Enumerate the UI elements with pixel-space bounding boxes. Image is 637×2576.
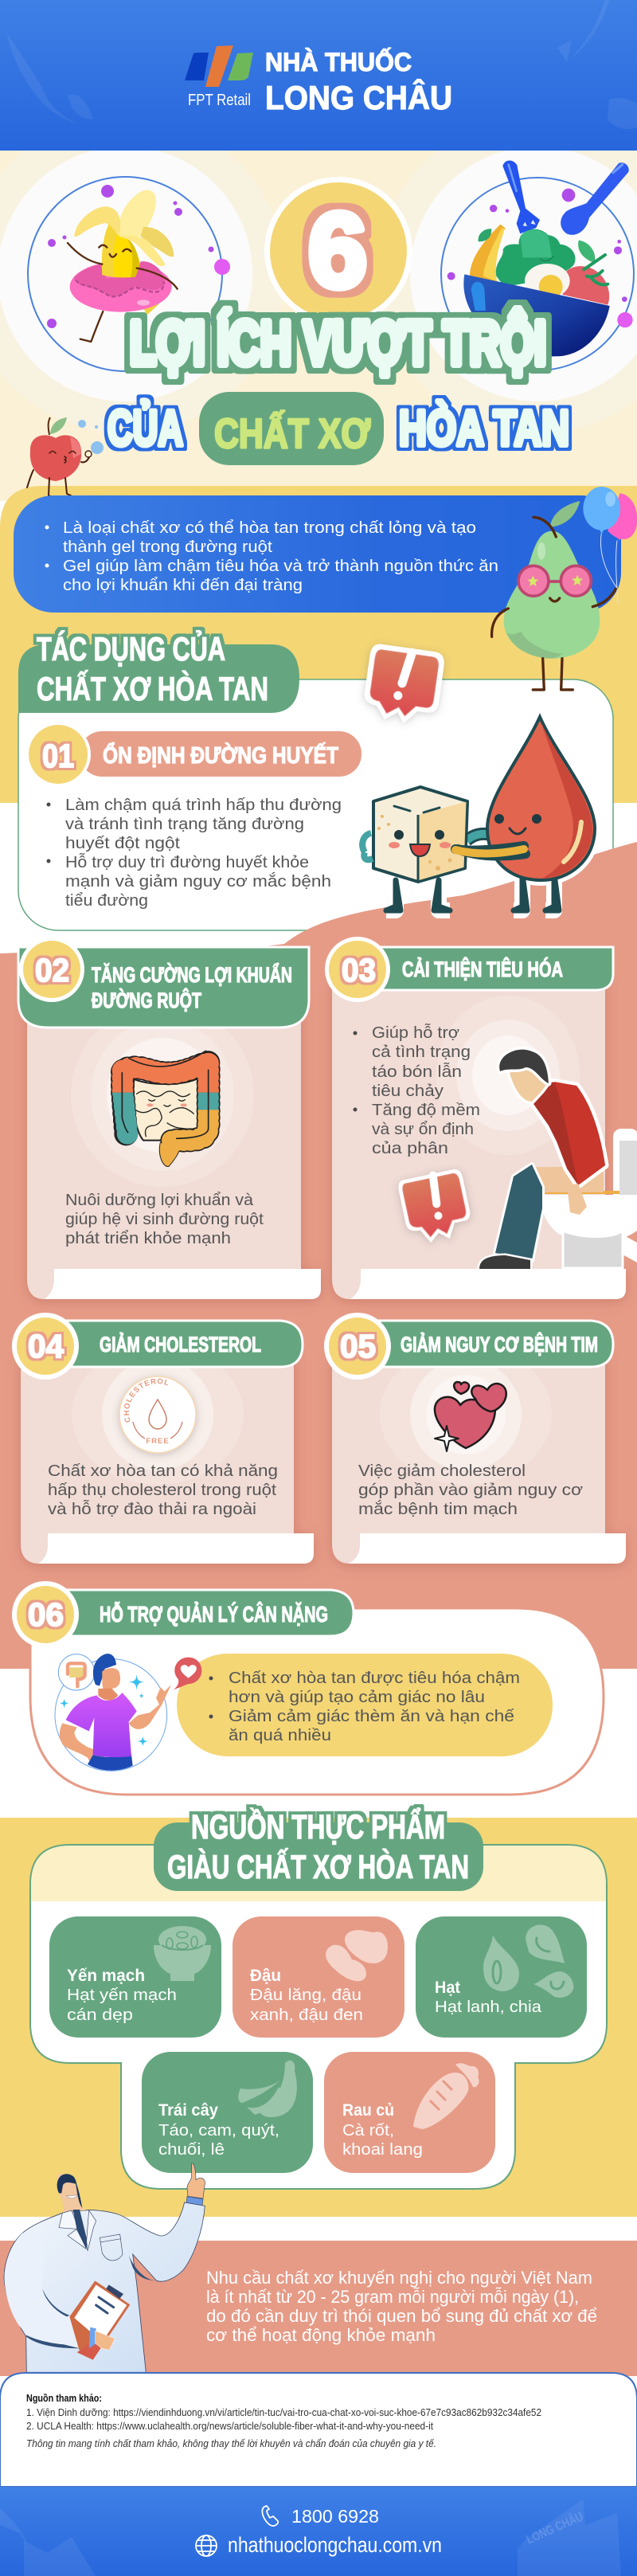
panel 05: heart disease	[324, 1313, 626, 1564]
icon: intestine	[122, 1051, 209, 1166]
text	[48, 1462, 278, 1518]
callout: ăn quá nhiều	[229, 1726, 331, 1744]
header 05: 05	[340, 1328, 376, 1364]
card: oats: Yến mạch	[67, 1967, 145, 1985]
header band	[0, 0, 637, 151]
background: salmon section	[0, 842, 637, 1669]
benefit 01 text: mạnh và giảm nguy cơ mắc bệnh	[65, 872, 331, 891]
white section below salmon	[0, 1669, 637, 1818]
icon: cholesterol free badge: FREE	[146, 1437, 170, 1446]
brand name: LONG CHÂU	[265, 78, 452, 116]
icon: FPT logo: FPT Retail	[188, 92, 251, 109]
icon: cholesterol free badge	[115, 1374, 200, 1458]
header 03: CẢI THIỆN TIÊU HÓA	[402, 956, 563, 981]
text: giúp hệ vi sinh đường ruột	[65, 1210, 264, 1228]
illustration: sugar cube and blood drop	[362, 717, 595, 910]
footer band: LONG CHÂU	[524, 2508, 585, 2547]
icon: speech bubble heart	[173, 1658, 201, 1690]
callout: Giảm cảm giác thèm ăn và hạn chế	[229, 1707, 515, 1725]
text: và sự ổn định	[372, 1120, 474, 1138]
panel: food sources	[30, 1807, 607, 2189]
card: oats: Hạt yến mạch	[67, 1986, 177, 2004]
text: Tăng độ mềm	[372, 1101, 480, 1119]
text: Việc giảm cholesterol	[358, 1462, 526, 1480]
card: oats	[49, 1916, 221, 2038]
illustration: banana in donut ring	[28, 177, 230, 371]
icon: cholesterol free badge: CHOLESTEROL	[123, 1378, 168, 1423]
text	[65, 1191, 264, 1247]
benefit 01 header: 01	[42, 738, 74, 774]
brand name: NHÀ THUỐC	[265, 48, 412, 76]
icon: bananas	[238, 2061, 297, 2117]
illustration: doctor	[4, 2163, 205, 2372]
text: Chất xơ hòa tan có khả năng	[48, 1462, 278, 1480]
panel: references: Thông tin mang tính chất tham khảo, không thay thế lời khuyên và chẩn đoán của chuyên gia y tế.	[26, 2437, 436, 2449]
panel: references: 2. UCLA Health: https://www.uclahealth.org/news/article/soluble-fiber-what-it-and-why-you-need-it	[26, 2420, 433, 2432]
background: yellow food section	[0, 1818, 637, 2217]
card: fruit: chuối, lê	[158, 2140, 225, 2159]
text	[354, 1024, 480, 1157]
header 04	[12, 1313, 303, 1380]
illustration: apple blowing bubbles	[27, 417, 104, 497]
text: daily fiber requirement: Nhu cầu chất xơ khuyến nghị cho người Việt Nam	[206, 2268, 592, 2288]
card: fruit: Trái cây	[158, 2101, 218, 2120]
card: vegetables: khoai lang	[342, 2140, 423, 2159]
panel: definition	[14, 495, 621, 613]
bullets	[45, 519, 498, 594]
phone: 1800 6928	[291, 2506, 379, 2527]
heading text	[37, 629, 268, 707]
background: cream hero	[0, 115, 637, 501]
icon: alert badge	[363, 644, 444, 725]
benefit 01 text: và tránh tình trạng tăng đường	[65, 815, 304, 833]
illustration: person pointing	[55, 1654, 171, 1771]
icon: alert badge	[397, 1168, 475, 1247]
sugar cube	[362, 787, 467, 882]
benefit 01 text: Làm chậm quá trình hấp thu đường	[65, 796, 342, 814]
website: nhathuoclongchau.com.vn	[228, 2533, 442, 2557]
illustration: man on toilet	[479, 1050, 637, 1269]
panel 06: weight management	[12, 1581, 604, 1795]
callout: hơn và giúp tạo cảm giác no lâu	[229, 1688, 485, 1706]
header 02: ĐƯỜNG RUỘT	[92, 988, 201, 1012]
bullets: thành gel trong đường ruột	[63, 538, 272, 556]
benefit 01 text	[46, 796, 342, 910]
text: và hỗ trợ đào thải ra ngoài	[48, 1500, 256, 1518]
card: oats: cán dẹp	[67, 2006, 133, 2024]
text: hấp thụ cholesterol trong ruột	[48, 1481, 276, 1499]
panel 03: digestion	[325, 937, 637, 1299]
text: của phân	[372, 1139, 448, 1157]
text: daily fiber requirement: do đó cần duy trì thói quen bổ sung đủ chất xơ để	[206, 2306, 597, 2326]
title line 2: CHẤT XƠ	[214, 410, 371, 457]
icon: bowl	[154, 1926, 211, 1981]
blood drop	[455, 717, 595, 880]
header 04: GIẢM CHOLESTEROL	[100, 1331, 261, 1357]
heading tab: GIÀU CHẤT XƠ HÒA TAN	[167, 1847, 469, 1885]
card: vegetables: Cà rốt,	[342, 2121, 394, 2139]
panel: references: 1. Viện Dinh dưỡng: https://viendinhduong.vn/vi/article/tin-tuc/vai-tro-cua-chat-xo-voi-suc-khoe-67e7c93ac862b932c34afe52	[26, 2406, 541, 2418]
header 06: HỖ TRỢ QUẢN LÝ CÂN NẶNG	[100, 1601, 328, 1627]
background: bottom white and salmon	[0, 2217, 637, 2376]
benefit 01 header	[29, 723, 361, 785]
text: daily fiber requirement: là ít nhất từ 20 - 25 gram mỗi người mỗi ngày (1),	[206, 2287, 579, 2307]
footer band	[0, 2487, 637, 2576]
benefit 01 text: Hỗ trợ duy trì đường huyết khỏe	[65, 853, 309, 871]
header 05	[324, 1313, 613, 1380]
panel: references	[0, 2373, 637, 2487]
text: Giúp hỗ trợ	[372, 1024, 459, 1042]
header 02: TĂNG CƯỜNG LỢI KHUẨN	[92, 962, 292, 987]
heading tab: NGUỒN THỰC PHẨM	[191, 1807, 445, 1846]
bullets: Là loại chất xơ có thể hòa tan trong chất lỏng và tạo	[63, 519, 476, 537]
header 03	[325, 937, 613, 1002]
heading text: CHẤT XƠ HÒA TAN	[37, 669, 268, 707]
text: táo bón lẫn	[372, 1063, 462, 1081]
card: seeds	[416, 1916, 587, 2038]
card: beans: Đậu	[250, 1967, 281, 1985]
store watermark	[0, 2500, 621, 2576]
text: daily fiber requirement	[206, 2268, 597, 2345]
header 04: 04	[28, 1328, 64, 1364]
panel 04: cholesterol	[12, 1313, 317, 1569]
bullets: Gel giúp làm chậm tiêu hóa và trở thành nguồn thức ăn	[63, 557, 498, 575]
text	[358, 1462, 583, 1518]
header 02: 02	[35, 952, 69, 989]
card: beans: xanh, đậu đen	[250, 2006, 363, 2024]
card: vegetables: Rau củ	[342, 2101, 394, 2120]
card: seeds: Hạt lanh, chia	[435, 1998, 542, 2016]
header 03: 03	[342, 952, 376, 989]
header 06	[12, 1581, 354, 1648]
badge: number 6	[264, 177, 412, 325]
icon: seeds	[483, 1924, 573, 1998]
text: phát triển khỏe mạnh	[65, 1229, 231, 1247]
callout	[177, 1654, 553, 1756]
pear mascot with balloons	[492, 487, 637, 690]
card: beans	[233, 1916, 404, 2038]
text: Nuôi dưỡng lợi khuẩn và	[65, 1191, 254, 1209]
header 06: 06	[28, 1596, 64, 1633]
icon: FPT logo	[185, 45, 253, 109]
text: góp phần vào giảm nguy cơ	[358, 1481, 583, 1499]
heading tab	[154, 1807, 483, 1891]
benefit 01 text: huyết đột ngột	[65, 834, 180, 852]
benefit 01 text: tiểu đường	[65, 891, 148, 910]
card: vegetables	[324, 2052, 495, 2173]
bullets: cho lợi khuẩn khi đến đại tràng	[63, 576, 303, 594]
card: fruit: Táo, cam, quýt,	[158, 2121, 279, 2139]
card: beans: Đậu lăng, đậu	[250, 1986, 361, 2004]
card: fruit	[142, 2052, 313, 2173]
title line 2: HÒA TAN	[399, 401, 569, 456]
panel 02: gut bacteria	[18, 937, 321, 1299]
header 02	[18, 937, 309, 1028]
brand name	[265, 48, 452, 116]
badge: number 6: 6	[308, 192, 367, 310]
title line 2	[107, 392, 569, 465]
icon: beans	[326, 1930, 388, 1981]
benefit 01 header: ỔN ĐỊNH ĐƯỜNG HUYẾT	[103, 742, 338, 769]
icon: hearts	[435, 1382, 506, 1451]
text: mắc bệnh tim mạch	[358, 1500, 518, 1518]
panel: benefits card	[18, 629, 613, 930]
text: tiêu chảy	[372, 1082, 444, 1100]
text: daily fiber requirement: cơ thể hoạt động khỏe mạnh	[206, 2325, 436, 2345]
title line 2: CỦA	[107, 400, 183, 456]
background: yellow, white and salmon sections	[0, 486, 637, 954]
callout: Chất xơ hòa tan được tiêu hóa chậm	[229, 1669, 520, 1687]
panel: references: Nguồn tham khảo:	[26, 2392, 102, 2404]
heading text: TÁC DỤNG CỦA	[37, 629, 225, 667]
illustration: salad bowl with fork and spoon	[441, 160, 634, 370]
text: cả tình trạng	[372, 1043, 471, 1061]
icon: carrot	[413, 2063, 479, 2129]
heading tab	[18, 644, 299, 713]
card: seeds: Hạt	[435, 1979, 460, 1997]
